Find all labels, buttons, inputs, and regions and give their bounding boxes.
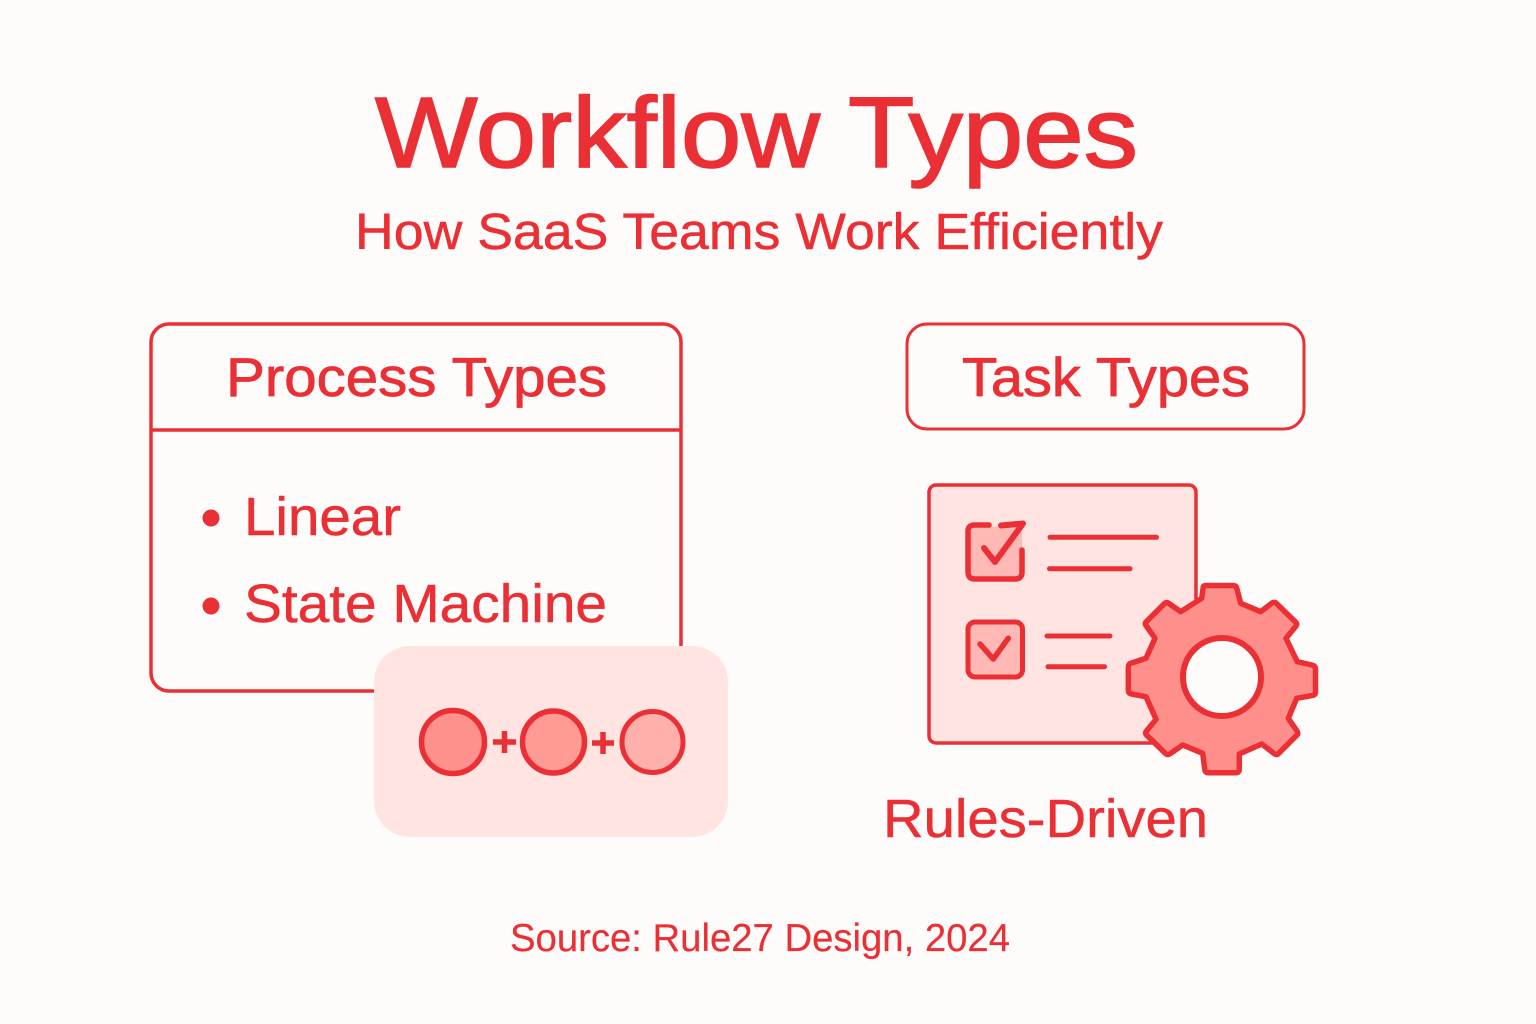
gear xyxy=(1128,586,1316,773)
checkbox one xyxy=(968,515,1026,579)
heading: process types: Process Types xyxy=(226,346,607,408)
subtitle: How SaaS Teams Work Efficiently xyxy=(355,203,1164,260)
panel: task types heading xyxy=(907,324,1304,429)
circle one xyxy=(422,710,484,774)
heading: task types: Task Types xyxy=(962,346,1250,408)
circle two xyxy=(522,711,584,773)
plus one xyxy=(493,731,516,753)
checkbox two xyxy=(968,622,1022,677)
panel outline xyxy=(151,324,681,691)
source note: Source: Rule27 Design, 2024 xyxy=(510,917,1010,960)
panel: process types xyxy=(151,324,681,691)
text lines two xyxy=(1047,636,1110,667)
text lines one xyxy=(1050,537,1156,569)
icon: checklist with gear xyxy=(929,485,1316,773)
circle three xyxy=(622,712,683,772)
heading outline xyxy=(907,324,1304,429)
callout background xyxy=(374,646,728,837)
title: Workflow Types xyxy=(375,77,1138,189)
bullet: linear: Linear xyxy=(244,487,401,547)
bullet: state machine: State Machine xyxy=(244,574,607,634)
plus two xyxy=(592,732,614,754)
header divider xyxy=(151,428,681,432)
checklist card xyxy=(929,485,1196,743)
label: rules-driven: Rules-Driven xyxy=(883,789,1208,849)
callout: linked circles xyxy=(374,646,728,837)
